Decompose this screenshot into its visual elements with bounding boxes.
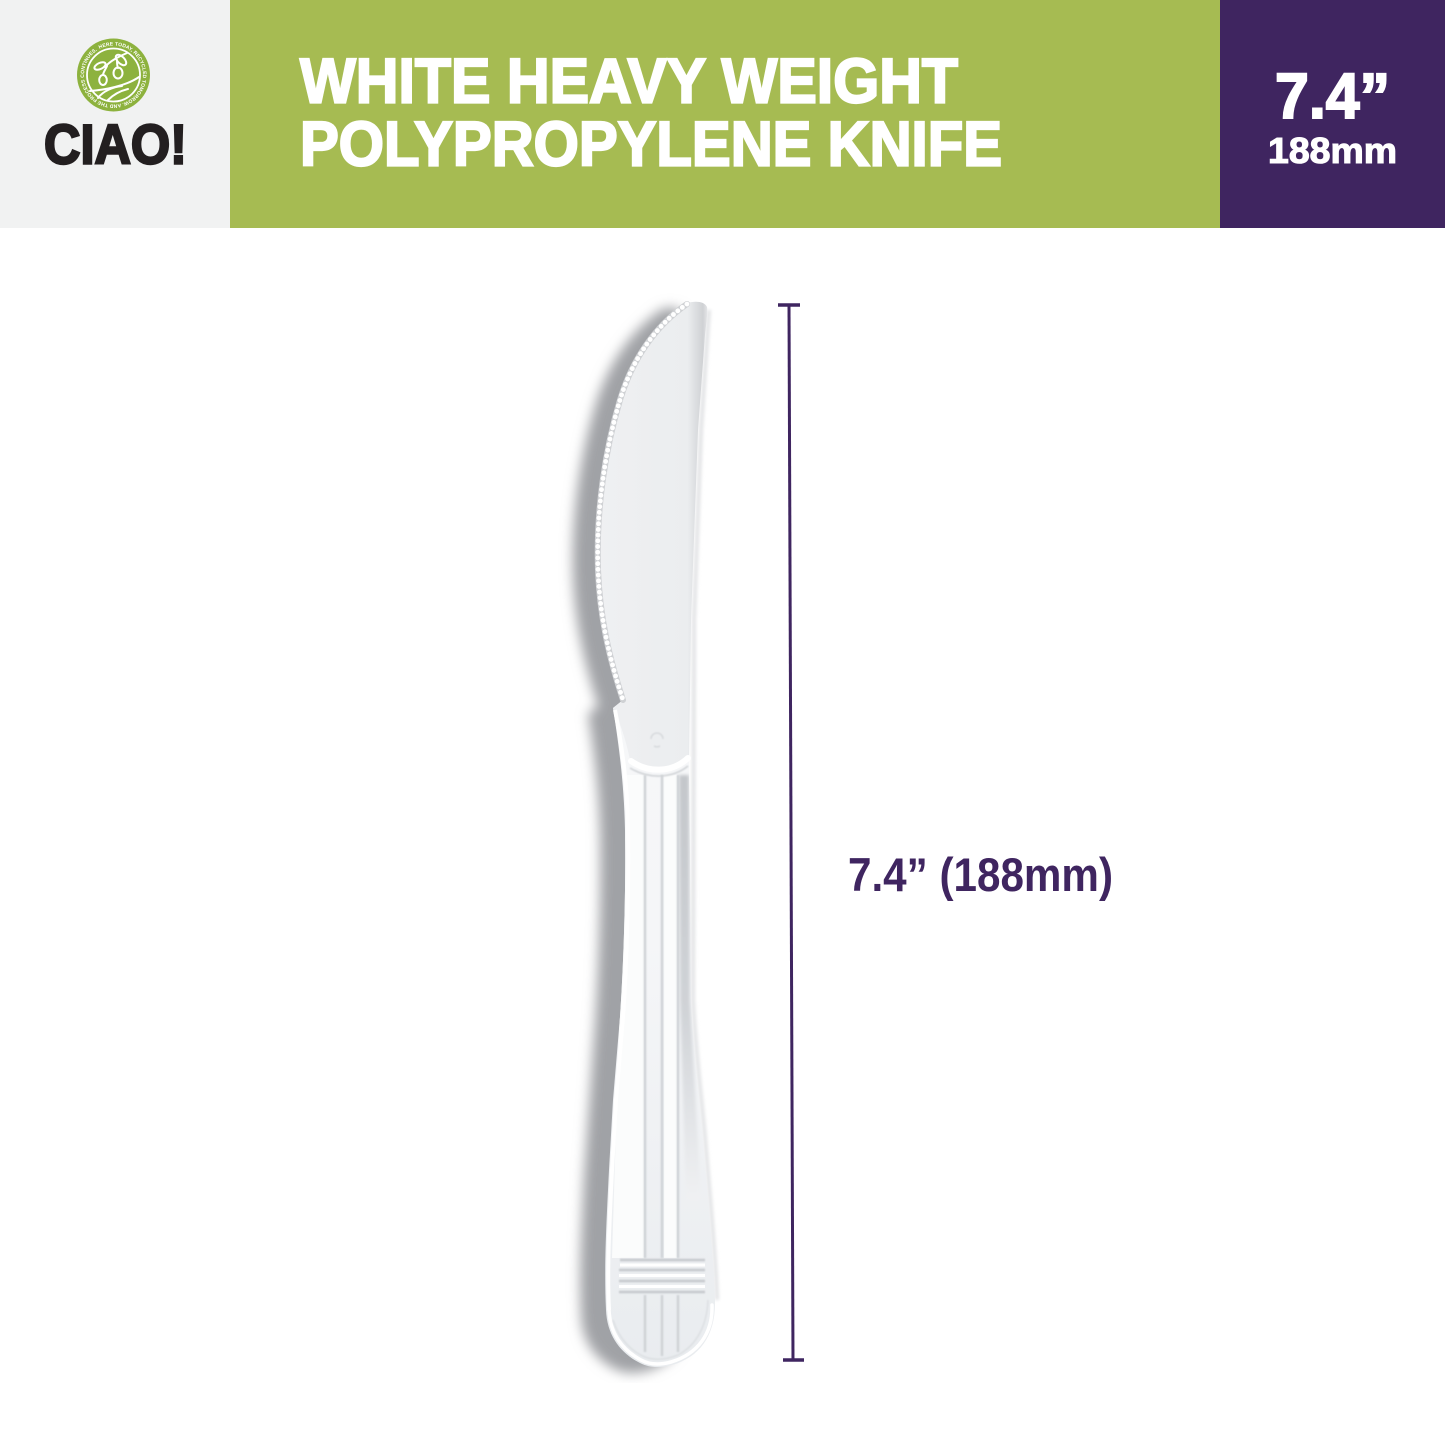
dimension line xyxy=(778,305,804,1360)
knife body xyxy=(605,702,715,1367)
size badge xyxy=(1268,60,1397,171)
size in inches: 7.4” xyxy=(1275,60,1390,132)
handle grooves xyxy=(612,775,705,1356)
knife illustration xyxy=(573,302,717,1373)
title line 2: POLYPROPYLENE KNIFE xyxy=(300,110,1002,180)
logo panel xyxy=(0,0,230,228)
vertical measure xyxy=(789,305,793,1360)
knife rim xyxy=(609,1305,712,1364)
title xyxy=(300,46,1002,180)
header band xyxy=(0,0,1445,228)
bolster shadow xyxy=(630,766,688,776)
bolster ridge xyxy=(631,758,688,770)
logo wordmark: CIAO! xyxy=(44,112,187,176)
size in millimetres: 188mm xyxy=(1268,130,1397,171)
title panel xyxy=(230,0,1220,228)
blade dimple xyxy=(651,733,663,747)
knife shadow xyxy=(573,308,690,1373)
size panel xyxy=(1220,0,1445,228)
blade xyxy=(598,302,707,769)
CIAO logo xyxy=(44,38,187,176)
knife right glow xyxy=(693,310,717,1300)
serrated edge xyxy=(598,304,687,700)
dimension label: 7.4” (188mm) xyxy=(848,848,1113,901)
bottom cap xyxy=(783,1358,804,1362)
left highlight xyxy=(608,710,628,1310)
icon: olive branch seal: HERE TODAY, RECYCLED TOMORROW. AND THE PROCESS CONTINUES. xyxy=(80,42,146,108)
title line 1: WHITE HEAVY WEIGHT xyxy=(300,46,958,116)
lower rim shade xyxy=(613,1300,708,1359)
top cap xyxy=(778,303,800,307)
